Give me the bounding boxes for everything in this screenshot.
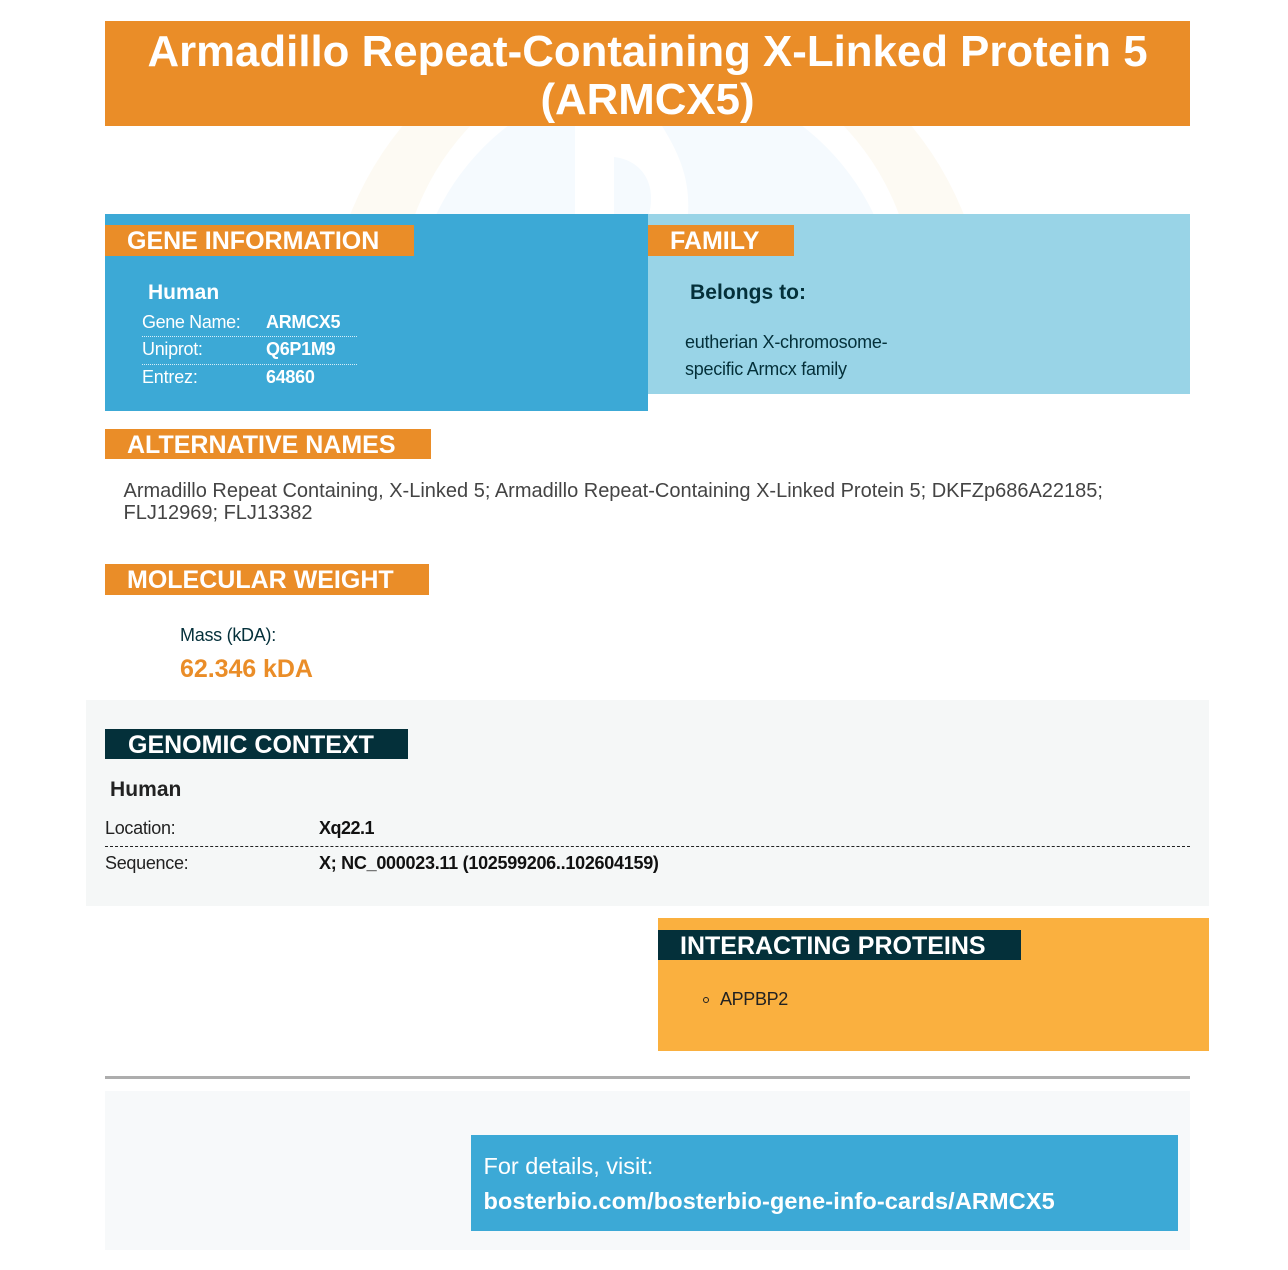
location row: Location: bbox=[105, 818, 175, 838]
panel: footer bbox=[105, 1091, 1190, 1250]
title banner: (ARMCX5) bbox=[540, 75, 755, 124]
gene name row bbox=[142, 308, 357, 337]
heading: interacting proteins: INTERACTING PROTEINS bbox=[680, 932, 986, 960]
mass value: 62.346 kDA bbox=[180, 655, 313, 683]
sequence row: Sequence: bbox=[105, 853, 188, 873]
callout: details link bbox=[471, 1135, 1178, 1231]
panel: gene information bbox=[105, 214, 648, 411]
entrez row: Entrez: bbox=[142, 367, 198, 387]
sequence row: X; NC_000023.11 (102599206..102604159) bbox=[319, 853, 659, 873]
heading: alternative names: ALTERNATIVE NAMES bbox=[127, 431, 396, 459]
uniprot row: Q6P1M9 bbox=[266, 339, 335, 359]
alternative names text: FLJ12969; FLJ13382 bbox=[124, 502, 313, 524]
location row: Xq22.1 bbox=[319, 818, 374, 838]
mass label: Mass (kDA): bbox=[180, 625, 276, 645]
species label: Human bbox=[148, 281, 219, 304]
panel: genomic context bbox=[86, 700, 1209, 906]
heading: family: FAMILY bbox=[670, 227, 759, 255]
panel: family bbox=[648, 214, 1190, 394]
family description: eutherian X-chromosome- bbox=[685, 332, 887, 352]
belongs to label: Belongs to: bbox=[690, 281, 806, 304]
family description bbox=[685, 332, 887, 379]
heading: molecular weight: MOLECULAR WEIGHT bbox=[127, 566, 394, 594]
heading: family bbox=[648, 225, 794, 256]
gene name row: Gene Name: bbox=[142, 312, 240, 332]
entrez row: 64860 bbox=[266, 367, 315, 387]
uniprot row bbox=[142, 336, 357, 365]
heading: genomic context: GENOMIC CONTEXT bbox=[128, 731, 374, 759]
gene name row: ARMCX5 bbox=[266, 312, 340, 332]
entrez row bbox=[142, 367, 315, 387]
title banner bbox=[105, 21, 1190, 126]
uniprot row: Uniprot: bbox=[142, 339, 203, 359]
alternative names text bbox=[124, 480, 1103, 524]
callout: details link: bosterbio.com/bosterbio-gene-info-cards/ARMCX5 bbox=[484, 1188, 1055, 1214]
location row bbox=[105, 811, 1190, 847]
species label: Human bbox=[110, 778, 181, 801]
sequence row bbox=[105, 853, 659, 873]
heading: gene information: GENE INFORMATION bbox=[127, 227, 379, 255]
family description: specific Armcx family bbox=[685, 358, 847, 378]
panel: interacting proteins bbox=[658, 918, 1209, 1051]
background watermark logo bbox=[350, 126, 964, 214]
list bullet bbox=[703, 997, 709, 1003]
protein list item: APPBP2 bbox=[720, 989, 788, 1009]
title banner: Armadillo Repeat-Containing X-Linked Protein 5 bbox=[147, 27, 1148, 76]
alternative names text: Armadillo Repeat Containing, X-Linked 5; Armadillo Repeat-Containing X-Linked Protein 5; DKFZp686A22185; bbox=[124, 480, 1103, 502]
callout: details link: For details, visit: bbox=[484, 1153, 653, 1179]
